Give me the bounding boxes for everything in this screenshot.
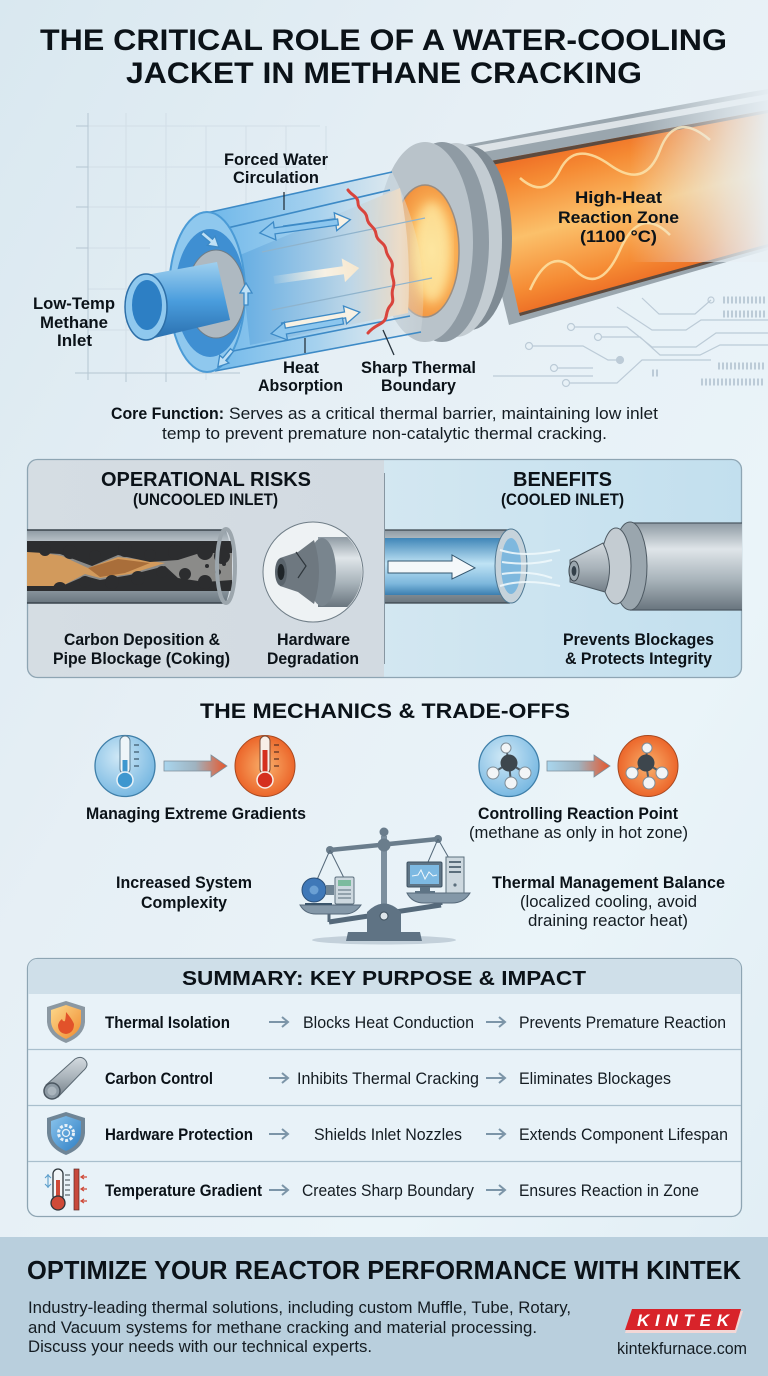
label: carbon deposition bbox=[53, 631, 230, 668]
arrow bbox=[269, 1073, 288, 1083]
pump bbox=[302, 878, 326, 902]
arrow bbox=[269, 1129, 288, 1139]
label: low-temp methane inlet: Low-Temp bbox=[33, 294, 115, 313]
background engineering grid bbox=[75, 113, 326, 382]
label: carbon deposition: Pipe Blockage (Coking) bbox=[53, 650, 230, 668]
icon: methane molecule, hot bbox=[618, 736, 678, 796]
label: high-heat reaction zone bbox=[558, 188, 679, 246]
label: hardware degradation bbox=[267, 631, 359, 668]
row: thermal isolation: Prevents Premature Reaction bbox=[519, 1013, 726, 1032]
low-temperature inlet pipe bbox=[125, 250, 245, 340]
row: carbon control: Inhibits Thermal Cracking bbox=[297, 1069, 479, 1088]
label: hardware degradation: Hardware bbox=[277, 631, 350, 649]
label: thermal management balance bbox=[492, 874, 725, 930]
label: heat absorption bbox=[258, 358, 343, 395]
row: thermal isolation: Blocks Heat Conduction bbox=[303, 1013, 474, 1032]
icon: metal pipe bbox=[44, 1057, 87, 1099]
heading: summary: SUMMARY: KEY PURPOSE & IMPACT bbox=[182, 967, 587, 990]
label: Controlling Reaction Point bbox=[478, 805, 678, 823]
heading: operational risks: (UNCOOLED INLET) bbox=[133, 491, 278, 509]
row: hardware protection bbox=[47, 1112, 728, 1155]
panel background bbox=[28, 958, 742, 1216]
steel flange bbox=[377, 142, 512, 342]
label: heat absorption: Absorption bbox=[258, 376, 343, 395]
arrow bbox=[486, 1073, 505, 1083]
callout leader lines bbox=[284, 192, 394, 355]
row: temperature gradient bbox=[45, 1169, 699, 1210]
label: high-heat reaction zone: (1100 °C) bbox=[580, 227, 657, 246]
label: (methane as only in hot zone) bbox=[469, 823, 688, 842]
panel: risks and benefits bbox=[27, 459, 742, 678]
heading: operational risks bbox=[101, 468, 311, 509]
footer text: Discuss your needs with our technical experts. bbox=[28, 1337, 372, 1356]
mechanic: managing extreme gradients bbox=[86, 736, 306, 823]
website: kintekfurnace.com bbox=[617, 1339, 747, 1358]
water flow arrows bbox=[198, 211, 361, 371]
row: hardware protection: Extends Component Lifespan bbox=[519, 1125, 728, 1144]
icon: hot thermometer bbox=[235, 736, 295, 796]
illustration: clean nozzle bbox=[569, 522, 742, 610]
icon: cold thermometer bbox=[95, 736, 155, 796]
logo: kintek: KINTEK bbox=[637, 1311, 731, 1330]
circuit decoration bbox=[493, 297, 768, 386]
label: prevents blockages: Prevents Blockages bbox=[563, 631, 714, 649]
blue glass jacket bbox=[169, 172, 450, 372]
label: prevents blockages bbox=[563, 631, 714, 668]
row: carbon control: Eliminates Blockages bbox=[519, 1069, 671, 1088]
core function text: Core Function: bbox=[111, 404, 224, 423]
label: prevents blockages: & Protects Integrity bbox=[565, 650, 713, 668]
footer heading: OPTIMIZE YOUR REACTOR PERFORMANCE WITH KINTEK bbox=[27, 1255, 741, 1285]
label: sharp thermal boundary bbox=[361, 358, 476, 395]
heading: benefits bbox=[501, 468, 624, 509]
title bbox=[40, 24, 727, 90]
arrow bbox=[269, 1017, 288, 1027]
footer text: and Vacuum systems for methane cracking and material processing. bbox=[28, 1318, 537, 1337]
control box bbox=[335, 877, 354, 904]
label: high-heat reaction zone: Reaction Zone bbox=[558, 208, 679, 227]
arrow bbox=[486, 1017, 505, 1027]
label: low-temp methane inlet: Methane bbox=[40, 313, 108, 332]
label bbox=[469, 805, 688, 842]
row: hardware protection: Shields Inlet Nozzles bbox=[314, 1125, 462, 1144]
label: forced water circulation: Forced Water bbox=[224, 150, 328, 169]
label: carbon deposition: Carbon Deposition & bbox=[64, 631, 220, 649]
arrow: cold to hot bbox=[164, 755, 227, 777]
label: increased system complexity: Increased System bbox=[116, 874, 252, 892]
hero diagram: water-cooling jacket on reactor tube bbox=[33, 80, 768, 395]
icon: thermometer and hot wall bbox=[45, 1169, 87, 1210]
panel background bbox=[27, 459, 742, 678]
arrow bbox=[269, 1185, 288, 1195]
row: carbon control: Carbon Control bbox=[105, 1070, 213, 1088]
icon: flame shield bbox=[47, 1001, 85, 1043]
row: thermal isolation bbox=[47, 1001, 726, 1043]
heading: mechanics and trade-offs: THE MECHANICS & TRADE-OFFS bbox=[200, 700, 570, 723]
label: low-temp methane inlet: Inlet bbox=[57, 331, 92, 350]
label: thermal management balance: (localized cooling, avoid bbox=[520, 892, 697, 911]
row: temperature gradient: Temperature Gradient bbox=[105, 1182, 262, 1200]
sharp thermal boundary line bbox=[348, 190, 394, 333]
arrow bbox=[486, 1185, 505, 1195]
label: thermal management balance: Thermal Management Balance bbox=[492, 874, 725, 892]
icon: gear shield bbox=[47, 1112, 85, 1155]
heading: benefits: (COOLED INLET) bbox=[501, 491, 624, 509]
core function text bbox=[111, 404, 658, 443]
footer text: Industry-leading thermal solutions, including custom Muffle, Tube, Rotary, bbox=[28, 1298, 571, 1317]
label: sharp thermal boundary: Sharp Thermal bbox=[361, 358, 476, 377]
summary header band bbox=[28, 959, 741, 994]
label: increased system complexity bbox=[116, 874, 252, 912]
label: sharp thermal boundary: Boundary bbox=[381, 376, 457, 395]
mechanic: controlling reaction point bbox=[469, 736, 688, 842]
heading: operational risks: OPERATIONAL RISKS bbox=[101, 468, 311, 491]
monitor bbox=[407, 862, 442, 887]
title: THE CRITICAL ROLE OF A WATER-COOLING bbox=[40, 24, 727, 57]
core function text: Serves as a critical thermal barrier, maintaining low inlet bbox=[229, 404, 658, 423]
row: temperature gradient: Ensures Reaction in Zone bbox=[519, 1181, 699, 1200]
row: thermal isolation: Thermal Isolation bbox=[105, 1014, 230, 1032]
label: hardware degradation: Degradation bbox=[267, 650, 359, 668]
label: forced water circulation bbox=[224, 150, 328, 187]
computer tower bbox=[446, 857, 464, 893]
label: forced water circulation: Circulation bbox=[233, 168, 319, 187]
arrow: cool to hot bbox=[547, 755, 610, 777]
heading: benefits: BENEFITS bbox=[513, 468, 612, 491]
label: Managing Extreme Gradients bbox=[86, 805, 306, 823]
label: heat absorption: Heat bbox=[283, 358, 319, 377]
icon: balance scale bbox=[300, 828, 470, 944]
label: increased system complexity: Complexity bbox=[141, 894, 228, 912]
illustration: coked pipe bbox=[27, 529, 235, 603]
row: carbon control bbox=[44, 1057, 671, 1099]
arrow bbox=[486, 1129, 505, 1139]
logo: kintek bbox=[625, 1309, 743, 1333]
footer band bbox=[0, 1237, 768, 1376]
panel: summary table bbox=[28, 958, 742, 1216]
illustration: cooled flow pipe bbox=[385, 529, 560, 603]
label: high-heat reaction zone: High-Heat bbox=[575, 188, 662, 207]
illustration: degraded nozzle bbox=[263, 522, 365, 622]
footer text bbox=[28, 1298, 571, 1356]
core function text: temp to prevent premature non-catalytic thermal cracking. bbox=[162, 424, 607, 443]
row: temperature gradient: Creates Sharp Boundary bbox=[302, 1181, 474, 1200]
icon: methane molecule, cool bbox=[479, 736, 539, 796]
title: JACKET IN METHANE CRACKING bbox=[126, 57, 642, 90]
label: low-temp methane inlet bbox=[33, 294, 115, 350]
label: thermal management balance: draining reactor heat) bbox=[528, 911, 688, 930]
row: hardware protection: Hardware Protection bbox=[105, 1126, 253, 1144]
hot reaction tube bbox=[465, 80, 768, 325]
